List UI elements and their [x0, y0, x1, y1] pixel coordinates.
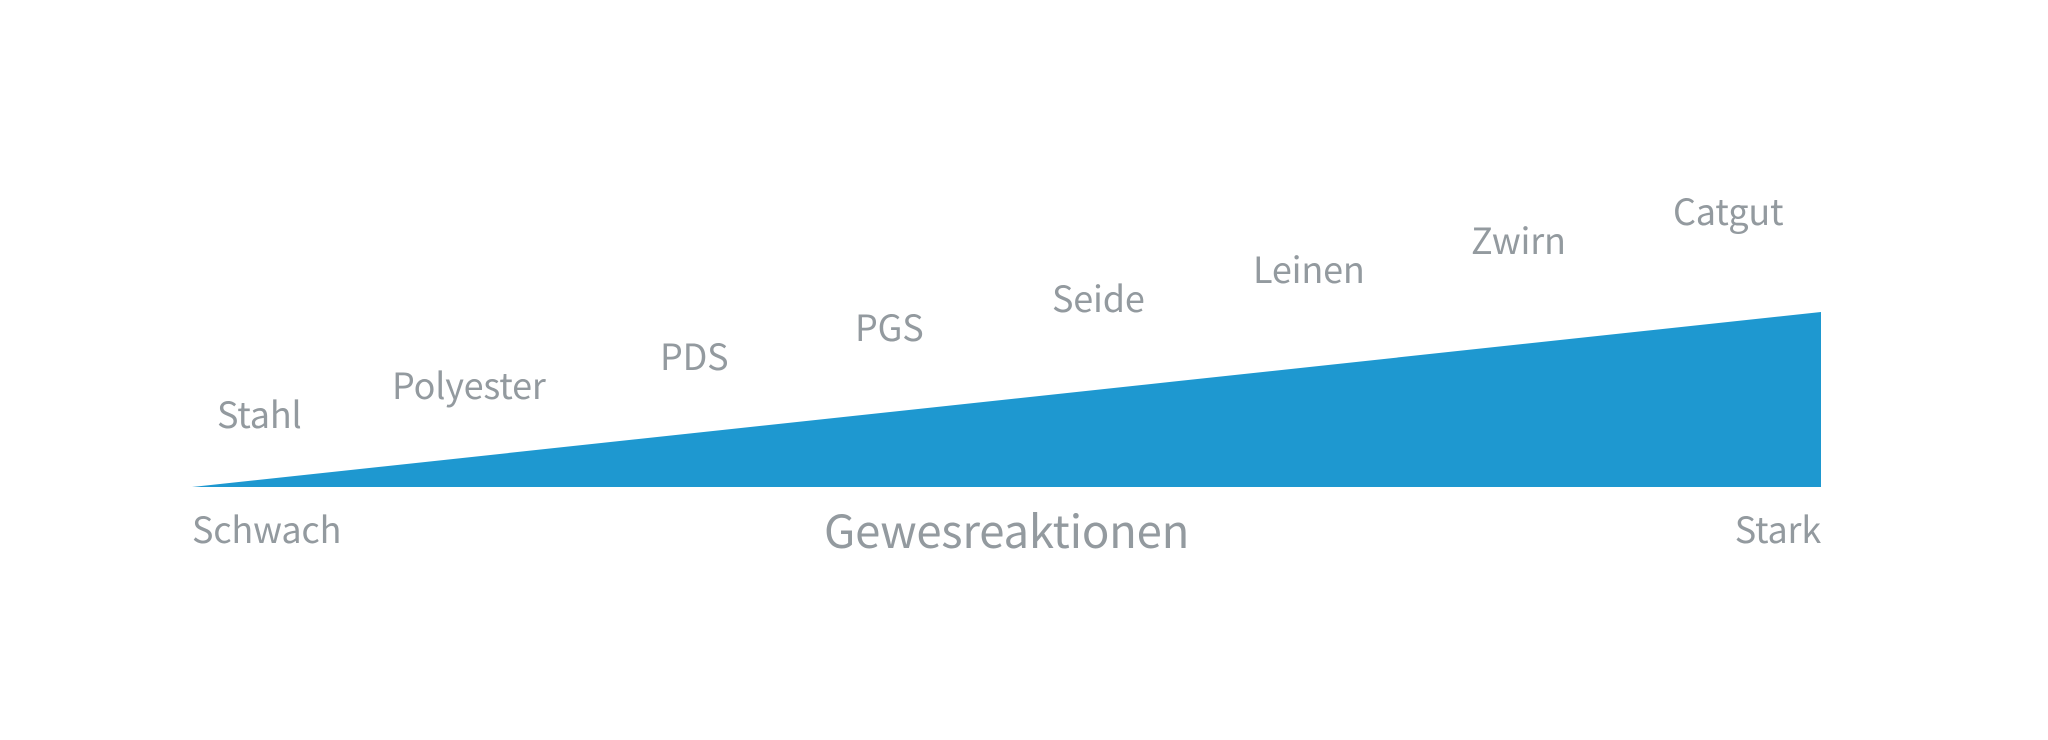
- axis label: Stark: Stark: [1735, 502, 1821, 554]
- label: PGS: PGS: [855, 300, 923, 352]
- label: Stahl: Stahl: [217, 387, 302, 439]
- label: Zwirn: Zwirn: [1471, 213, 1566, 265]
- label: Seide: Seide: [1052, 271, 1145, 323]
- label: Leinen: Leinen: [1253, 242, 1365, 294]
- label: Polyester: Polyester: [392, 358, 547, 410]
- wedge: reaction strength: [192, 312, 1821, 487]
- axis label: Schwach: Schwach: [192, 502, 341, 554]
- label: PDS: PDS: [660, 329, 728, 381]
- label: Catgut: Catgut: [1673, 184, 1784, 236]
- axis title: Gewesreaktionen: Gewesreaktionen: [824, 496, 1189, 562]
